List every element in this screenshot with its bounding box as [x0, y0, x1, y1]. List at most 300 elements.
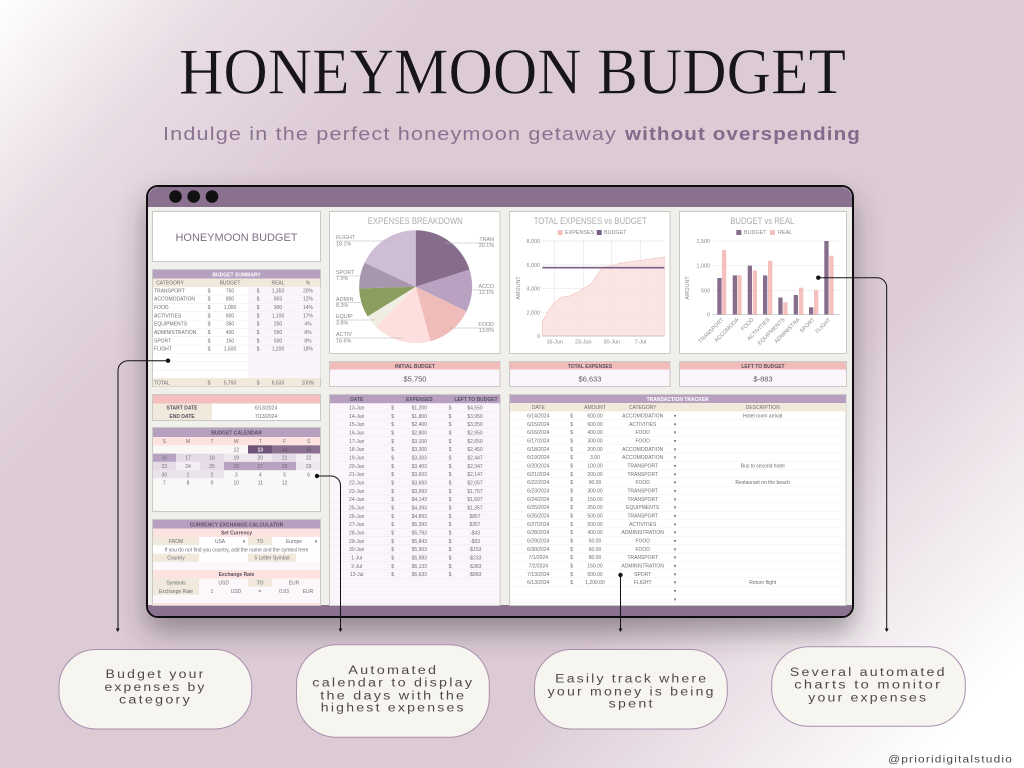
panel: daily expenses table: $5,843	[412, 539, 427, 545]
panel: transaction tracker: ▾	[674, 564, 677, 570]
axis labels: ACTIVITIES	[746, 317, 772, 342]
panel: transaction tracker: TRANSPORT	[627, 464, 658, 470]
panel: budget summary: 800	[226, 313, 234, 319]
panel: transaction tracker: ▾	[674, 514, 677, 520]
panel: daily expenses table: 26-Jun	[349, 514, 365, 520]
panel: daily expenses table: $4,393	[412, 506, 427, 512]
panel: budget calendar: 4	[259, 472, 262, 478]
panel: daily expenses table: $	[449, 422, 452, 428]
pie labels: 12.1%	[479, 290, 494, 296]
panel: budget summary: $	[208, 288, 211, 294]
panel: currency exchange calculator: 0.93	[279, 589, 289, 595]
panel: daily expenses table: $	[449, 447, 452, 453]
panel: budget summary: TRANSPORT	[154, 288, 185, 294]
panel: budget calendar: S	[163, 439, 167, 445]
callout: budget by category: category	[119, 695, 192, 707]
panel: daily expenses table: 20-Jun	[349, 464, 365, 470]
panel: budget summary: $	[208, 297, 211, 303]
panel: transaction tracker: ▾	[674, 572, 677, 578]
panel: budget summary: $	[257, 380, 260, 386]
callout: automated calendar: the days with the	[320, 690, 466, 702]
panel: daily expenses table: $6,133	[412, 564, 427, 570]
panel: currency exchange calculator: TO	[257, 580, 264, 586]
panel: currency exchange calculator: USD	[231, 589, 242, 595]
pie labels: 16.6%	[336, 338, 351, 344]
panel: daily expenses table: EXPENSES	[406, 397, 433, 403]
panel: daily expenses table: $	[391, 547, 394, 553]
panel: transaction tracker: 6/18/2024	[527, 447, 550, 453]
panel: transaction tracker: Hotel room arrival	[743, 414, 782, 420]
callout: track spending	[534, 650, 727, 729]
panel: transaction tracker: ADMINISTRATION	[621, 530, 664, 536]
panel: daily expenses table: $2,347	[467, 464, 483, 470]
panel: daily expenses table: $357	[469, 522, 481, 528]
panel: budget summary: 5,750	[224, 380, 236, 386]
panel: transaction tracker: ACCOMODATION	[622, 455, 664, 461]
panel: transaction tracker: 6/27/2024	[527, 522, 550, 528]
panel: transaction tracker: 6/22/2024	[527, 480, 550, 486]
baseline axis	[712, 314, 840, 316]
panel: transaction tracker: 200.00	[587, 447, 603, 453]
callout: automated charts: Several automated	[790, 667, 947, 679]
panel: budget calendar: F	[283, 439, 286, 445]
axis labels: 8,000	[526, 239, 540, 245]
panel: currency exchange calculator: CURRENCY EXCHANGE CALCULATOR	[190, 522, 284, 528]
panel: daily expenses table: $	[449, 489, 452, 495]
panel: budget calendar: 9	[211, 481, 214, 487]
panel: budget summary: $	[257, 330, 260, 336]
panel: daily expenses table: $	[391, 447, 394, 453]
axis labels: FOOD	[740, 317, 755, 332]
panel: transaction tracker: ▾	[674, 488, 677, 494]
panel: daily expenses table: 16-Jun	[349, 430, 365, 436]
panel: budget summary: $	[257, 297, 260, 303]
panel: transaction tracker: 100.00	[587, 464, 603, 470]
panel: daily expenses table: $	[449, 530, 452, 536]
panel: daily expenses table: $4,143	[412, 497, 427, 503]
panel: budget calendar: 3	[235, 472, 238, 478]
axis labels: 1,000	[696, 264, 710, 270]
panel: transaction tracker: 600.00	[587, 422, 603, 428]
panel: daily expenses table: $	[449, 547, 452, 553]
panel: budget summary: $	[208, 313, 211, 319]
panel: daily expenses table: $1,357	[467, 506, 483, 512]
panel: transaction tracker: 6/21/2024	[527, 472, 550, 478]
panel: transaction tracker: 1,200.00	[585, 580, 605, 586]
panel: daily expenses table: $	[391, 439, 394, 445]
panel: budget summary: $	[257, 305, 260, 311]
panel: transaction tracker: ▾	[674, 455, 677, 461]
panel: daily expenses table: $2,450	[467, 447, 483, 453]
panel: budget calendar: 24	[185, 464, 191, 470]
KPI card: initial budget: INITIAL BUDGET	[395, 364, 435, 370]
panel: daily expenses table: $	[391, 430, 394, 436]
panel: budget summary: 1,000	[224, 305, 236, 311]
panel: daily expenses table: $	[449, 539, 452, 545]
panel: transaction tracker: 50.00	[589, 538, 601, 544]
panel: currency exchange calculator	[152, 520, 320, 606]
panel: daily expenses table: $	[449, 472, 452, 478]
panel: transaction tracker: TRANSPORT	[627, 488, 658, 494]
panel: transaction tracker: 80.00	[589, 555, 601, 561]
panel: daily expenses table: 14-Jun	[349, 414, 365, 420]
panel: daily expenses table: $	[391, 497, 394, 503]
panel: daily expenses table: 15-Jun	[349, 422, 365, 428]
panel: daily expenses table: 21-Jun	[349, 472, 365, 478]
panel: budget calendar: 30	[162, 472, 167, 478]
panel: currency exchange calculator: EUR	[289, 580, 300, 586]
panel: budget calendar: 28	[282, 464, 288, 470]
panel: daily expenses table: $3,693	[412, 480, 427, 486]
panel: daily expenses table: -$383	[469, 564, 482, 570]
panel: transaction tracker: ▾	[674, 447, 677, 453]
panel: budget summary: 750	[226, 288, 234, 294]
pie labels: SPORT	[336, 270, 355, 276]
panel: budget summary: CATEGORY	[156, 281, 184, 287]
panel: daily expenses table: -$43	[470, 530, 480, 536]
panel: budget summary: 1,100	[272, 313, 284, 319]
callout: automated charts: your expenses	[808, 692, 928, 704]
panel: daily expenses table: $	[391, 464, 394, 470]
panel: transaction tracker: FOOD	[635, 538, 650, 544]
callout: budget by category: expenses by	[104, 682, 206, 694]
callout: automated calendar: highest expenses	[321, 703, 466, 715]
axis labels: EQUIPMENTS	[757, 317, 787, 347]
panel: budget summary: 6,633	[272, 380, 284, 386]
panel: daily expenses table: $	[391, 480, 394, 486]
panel: budget summary: 17%	[303, 313, 314, 319]
panel: budget calendar: 19	[234, 456, 239, 462]
KPI card: total expenses: TOTAL EXPENSES	[568, 364, 613, 370]
panel: transaction tracker: 6/19/2024	[527, 455, 550, 461]
panel: budget summary: EQUIPMENTS	[154, 322, 188, 328]
panel: transaction tracker: ADMINISTRATION	[621, 564, 664, 570]
panel: daily expenses table: 18-Jun	[349, 447, 365, 453]
panel: daily expenses table: $2,057	[467, 480, 483, 486]
panel: daily expenses table: $	[391, 572, 394, 578]
panel: transaction tracker: ▾	[674, 497, 677, 503]
expenses area	[542, 257, 664, 336]
panel: transaction tracker: 400.00	[587, 530, 603, 536]
panel: transaction tracker: 7/13/2024	[527, 572, 550, 578]
panel: currency exchange calculator: Europe	[286, 539, 302, 545]
connector: budget summary to first callout	[116, 358, 170, 632]
grid lines	[712, 241, 840, 290]
panel: budget summary: $	[208, 380, 211, 386]
panel: daily expenses table: $3,603	[412, 472, 427, 478]
panel: daily expenses table: $1,800	[412, 414, 427, 420]
panel: budget summary: 150	[226, 338, 234, 344]
panel: budget calendar: 25	[209, 464, 215, 470]
callout: track spending: your money is being	[548, 686, 716, 698]
panel: budget summary: 4%	[304, 322, 312, 328]
panel: daily expenses table: $	[391, 530, 394, 536]
panel: transaction tracker: ▾	[674, 538, 677, 544]
panel: daily expenses table: $1,757	[467, 489, 483, 495]
panel: currency exchange calculator: ▾	[315, 539, 318, 545]
panel: daily expenses table: $	[391, 414, 394, 420]
pie labels: 20.1%	[479, 243, 494, 249]
panel: budget summary: FOOD	[154, 305, 169, 311]
panel: budget calendar: 16	[162, 456, 167, 462]
axis labels: 6,000	[526, 263, 540, 269]
panel: budget summary: 1,200	[272, 347, 284, 353]
panel: daily expenses table: $3,100	[412, 439, 427, 445]
panel: budget calendar: 14	[282, 447, 288, 453]
panel: budget summary: SPORT	[154, 338, 171, 344]
pie labels: FLIGHT	[336, 235, 356, 241]
panel: daily expenses table: $3,303	[412, 456, 427, 462]
panel: budget summary: 900	[274, 305, 282, 311]
callout: track spending: spent	[609, 699, 655, 711]
panel: currency exchange calculator: EUR	[303, 589, 314, 595]
panel: transaction tracker: TRANSPORT	[627, 514, 658, 520]
legend	[558, 230, 627, 236]
panel: budget calendar: 1	[187, 472, 190, 478]
panel: transaction tracker: FOOD	[635, 438, 650, 444]
panel: trip dates	[152, 394, 320, 420]
callout: automated charts: charts to monitor	[794, 680, 942, 692]
callout: budget by category: Budget your	[106, 669, 206, 681]
panel: transaction tracker: 250.00	[587, 505, 603, 511]
panel: budget calendar: 20	[258, 456, 263, 462]
panel: budget calendar: T	[259, 439, 262, 445]
watermark handle: @prioridigitalstudio	[888, 755, 1013, 766]
panel: daily expenses table: $	[391, 406, 394, 412]
panel: transaction tracker: $	[570, 422, 573, 428]
panel: budget summary: 8%	[304, 330, 312, 336]
axis labels: TRANSPORT	[698, 317, 726, 345]
panel: transaction tracker: $	[570, 455, 573, 461]
panel: transaction tracker: ACTIVITIES	[629, 522, 657, 528]
panel: daily expenses table: $	[449, 480, 452, 486]
panel: daily expenses table: $	[449, 456, 452, 462]
panel: transaction tracker: $	[570, 547, 573, 553]
panel: daily expenses table: $3,950	[467, 414, 483, 420]
panel: currency exchange calculator: TO	[257, 539, 264, 545]
pie labels: 8.3%	[336, 303, 348, 309]
panel: daily expenses table: $3,403	[412, 464, 427, 470]
panel: currency exchange calculator: Set Currency	[221, 531, 252, 537]
panel: sheet title: HONEYMOON BUDGET	[176, 232, 298, 244]
panel: budget summary: %	[306, 281, 311, 287]
panel: budget summary: 250	[274, 322, 282, 328]
pie labels: EQUIP	[336, 314, 353, 320]
panel: transaction tracker: 6/28/2024	[527, 530, 550, 536]
panel: budget summary: 20%	[303, 288, 314, 294]
panel: transaction tracker: 300.00	[587, 488, 603, 494]
panel: budget summary: ACTIVITIES	[154, 313, 182, 319]
panel: daily expenses table: $	[391, 456, 394, 462]
KPI card: left to budget	[680, 362, 846, 386]
panel: transaction tracker: $	[570, 464, 573, 470]
panel: transaction tracker: ▾	[674, 580, 677, 586]
callout: automated calendar	[296, 645, 489, 737]
panel: transaction tracker: ACCOMODATION	[622, 447, 664, 453]
panel: daily expenses table: $	[449, 464, 452, 470]
panel: daily expenses table: $2,650	[467, 439, 483, 445]
panel: transaction tracker: ▾	[674, 522, 677, 528]
panel: daily expenses table: 13-Jun	[349, 406, 365, 412]
KPI card: left to budget: $-883	[753, 374, 773, 384]
pie labels: 3.8%	[336, 320, 348, 326]
panel: transaction tracker: Bus to second hotel	[741, 464, 785, 470]
panel: daily expenses table: $1,200	[412, 406, 427, 412]
budget bars	[717, 241, 829, 315]
axis labels: 0	[537, 334, 540, 340]
axis labels: 2,000	[526, 310, 540, 316]
panel: transaction tracker: 6/15/2024	[527, 422, 550, 428]
panel: transaction tracker: $	[570, 447, 573, 453]
panel: currency exchange calculator: ▾	[243, 539, 246, 545]
panel: daily expenses table: $4,893	[412, 514, 427, 520]
panel: budget summary: $	[208, 338, 211, 344]
panel: currency exchange calculator: USD	[218, 580, 229, 586]
panel: budget calendar: BUDGET CALENDAR	[211, 431, 262, 437]
panel: transaction tracker: 400.00	[587, 430, 603, 436]
panel: budget summary: $	[208, 347, 211, 353]
panel: daily expenses table: 27-Jun	[349, 522, 365, 528]
KPI card: initial budget	[330, 362, 500, 386]
panel: daily expenses table: 28-Jun	[349, 530, 365, 536]
panel: budget calendar: 26	[234, 464, 239, 470]
panel: budget calendar: 10	[234, 481, 239, 487]
panel: transaction tracker: ▾	[674, 430, 677, 436]
panel: daily expenses table: $	[391, 506, 394, 512]
panel: daily expenses table: $	[449, 556, 452, 562]
panel: expenses breakdown pie chart	[330, 212, 500, 354]
panel: transaction tracker: TRANSPORT	[627, 555, 658, 561]
panel: daily expenses table: $3,300	[412, 447, 427, 453]
panel: transaction tracker: FOOD	[635, 480, 650, 486]
axis labels: 0	[707, 313, 710, 319]
panel: transaction tracker: $	[570, 580, 573, 586]
panel: transaction tracker: ▾	[674, 464, 677, 470]
panel: daily expenses table: $2,400	[412, 422, 427, 428]
callout: track spending: Easily track where	[555, 674, 708, 686]
axis labels: 7-Jul	[634, 340, 646, 346]
real bars	[722, 250, 834, 315]
panel: budget summary: 1,350	[272, 288, 284, 294]
axis labels: AMOUNT	[685, 276, 691, 300]
pie labels: FOOD	[478, 322, 494, 328]
panel: daily expenses table: 29-Jun	[349, 539, 365, 545]
panel: budget calendar: 18	[209, 456, 215, 462]
panel: budget calendar: W	[234, 439, 239, 445]
panel: daily expenses table: 17-Jun	[349, 439, 365, 445]
panel: budget summary: 14%	[303, 305, 314, 311]
panel: budget calendar: 12	[282, 481, 288, 487]
panel: transaction tracker: SPORT	[634, 572, 651, 578]
panel: transaction tracker: 6/30/2024	[527, 547, 550, 553]
panel: transaction tracker: 6/29/2024	[527, 538, 550, 544]
panel: daily expenses table: $	[449, 406, 452, 412]
panel: daily expenses table: $	[391, 472, 394, 478]
panel: transaction tracker: $	[570, 538, 573, 544]
panel: budget summary: 100%	[302, 380, 315, 386]
panel: budget calendar: 22	[306, 456, 312, 462]
panel: transaction tracker: $	[570, 572, 573, 578]
panel: transaction tracker: $	[570, 522, 573, 528]
panel: budget summary	[152, 270, 320, 386]
panel: transaction tracker: 7/2/2024	[529, 564, 548, 570]
callout: automated calendar: calendar to display	[312, 678, 474, 690]
panel: transaction tracker: EQUIPMENTS	[626, 505, 660, 511]
panel: transaction tracker: 600.00	[587, 414, 603, 420]
panel: daily expenses table: $	[391, 514, 394, 520]
panel: budget summary: 550	[274, 330, 282, 336]
panel: transaction tracker: ACTIVITIES	[629, 422, 657, 428]
panel: transaction tracker: 6/16/2024	[527, 430, 550, 436]
panel: transaction tracker: Return flight	[749, 580, 777, 586]
panel: currency exchange calculator: USA	[215, 539, 226, 545]
panel: budget calendar: S	[307, 439, 311, 445]
panel: transaction tracker: 200.00	[587, 472, 603, 478]
panel: budget calendar: 15	[306, 447, 312, 453]
panel: budget calendar: 12	[234, 447, 239, 453]
panel: budget calendar: 29	[306, 464, 312, 470]
panel: transaction tracker: ▾	[674, 555, 677, 561]
panel: budget summary: ADMINISTRATION	[154, 330, 197, 336]
panel: daily expenses table: $	[391, 539, 394, 545]
panel: budget summary: $	[208, 322, 211, 328]
panel: transaction tracker: 500.00	[587, 514, 603, 520]
panel: transaction tracker: 6/26/2024	[527, 514, 550, 520]
panel: transaction tracker: ▾	[674, 530, 677, 536]
window control dots	[169, 190, 218, 203]
panel: trip dates: START DATE	[167, 406, 198, 412]
panel: daily expenses table: $1,607	[467, 497, 483, 503]
panel: daily expenses table: 1-Jul	[351, 556, 362, 562]
panel: transaction tracker: 150.00	[587, 497, 603, 503]
panel: daily expenses table: $2,800	[412, 430, 427, 436]
connector: charts to fourth callout	[816, 276, 889, 632]
panel: budget vs real bar chart: BUDGET vs REAL	[730, 216, 794, 227]
window title bar	[148, 187, 852, 207]
panel: daily expenses table: $5,903	[412, 547, 427, 553]
pie labels: ADMIN	[336, 297, 353, 303]
panel: currency exchange calculator: 1	[211, 589, 214, 595]
pie leader lines	[336, 241, 494, 338]
panel: transaction tracker: $	[570, 438, 573, 444]
title: HONEYMOON BUDGET	[179, 36, 846, 108]
panel: daily expenses table: $	[391, 422, 394, 428]
panel: transaction tracker: 500.00	[587, 522, 603, 528]
axis labels: 500	[701, 288, 710, 294]
panel: currency exchange calculator: FROM	[169, 539, 183, 545]
panel: daily expenses table: $	[449, 497, 452, 503]
panel: budget summary: REAL	[271, 281, 285, 287]
subtitle: Indulge in the perfect honeymoon getaway	[163, 123, 617, 144]
legend: EXPENSES	[565, 230, 594, 236]
panel: daily expenses table: -$233	[469, 556, 482, 562]
panel: transaction tracker: 6/25/2024	[527, 505, 550, 511]
grid lines	[542, 241, 664, 336]
panel: transaction tracker: FOOD	[635, 430, 650, 436]
panel: transaction tracker: $	[570, 505, 573, 511]
legend: BUDGET	[744, 230, 767, 236]
panel: currency exchange calculator: =	[259, 589, 262, 595]
panel: daily expenses table: $2,147	[467, 472, 483, 478]
panel: daily expenses table: 2-Jul	[351, 564, 362, 570]
panel: budget summary: 8%	[304, 338, 312, 344]
panel: transaction tracker: 60.00	[589, 547, 601, 553]
panel: currency exchange calculator: Exchange Rate	[159, 589, 193, 595]
axis labels: 4,000	[526, 287, 540, 293]
panel: budget calendar: 13	[258, 447, 263, 453]
callout: budget by category	[59, 650, 252, 729]
panel: budget summary: 800	[226, 297, 234, 303]
